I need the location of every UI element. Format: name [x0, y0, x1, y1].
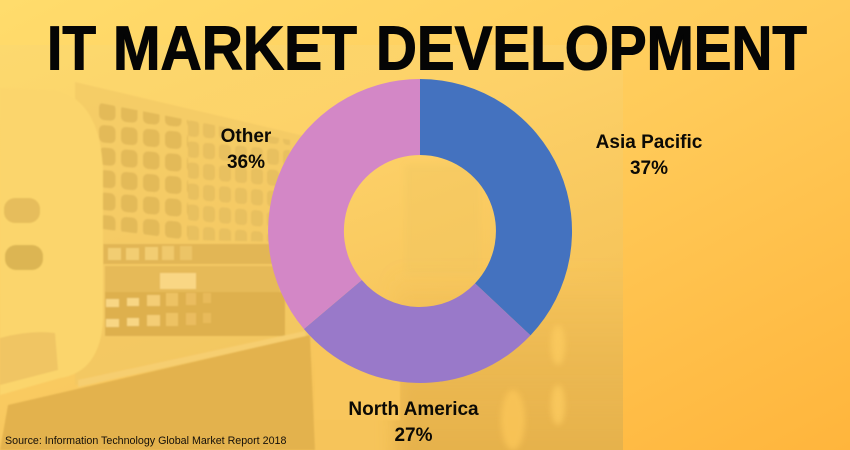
- background photo: server rack: [0, 45, 645, 450]
- label: Asia Pacific: Asia Pacific: [596, 132, 702, 153]
- segment: North America 27%: [304, 280, 530, 383]
- blurred background highlights: [502, 329, 565, 449]
- label: Asia Pacific: 37%: [630, 158, 668, 179]
- source note: Source: Information Technology Global Market Report 2018: [5, 435, 286, 447]
- title: [47, 14, 807, 84]
- server handle: [0, 88, 103, 395]
- label: Other: Other: [221, 126, 271, 147]
- label: North America: 27%: [394, 425, 433, 446]
- label: Other: 36%: [227, 152, 265, 173]
- segment: Asia Pacific 37%: [420, 79, 572, 335]
- title: IT: [47, 14, 96, 84]
- title: MARKET: [113, 14, 357, 84]
- label: North America: North America: [348, 399, 479, 420]
- title: DEVELOPMENT: [376, 14, 807, 84]
- segment: Other 36%: [268, 79, 420, 329]
- donut chart: [268, 79, 572, 383]
